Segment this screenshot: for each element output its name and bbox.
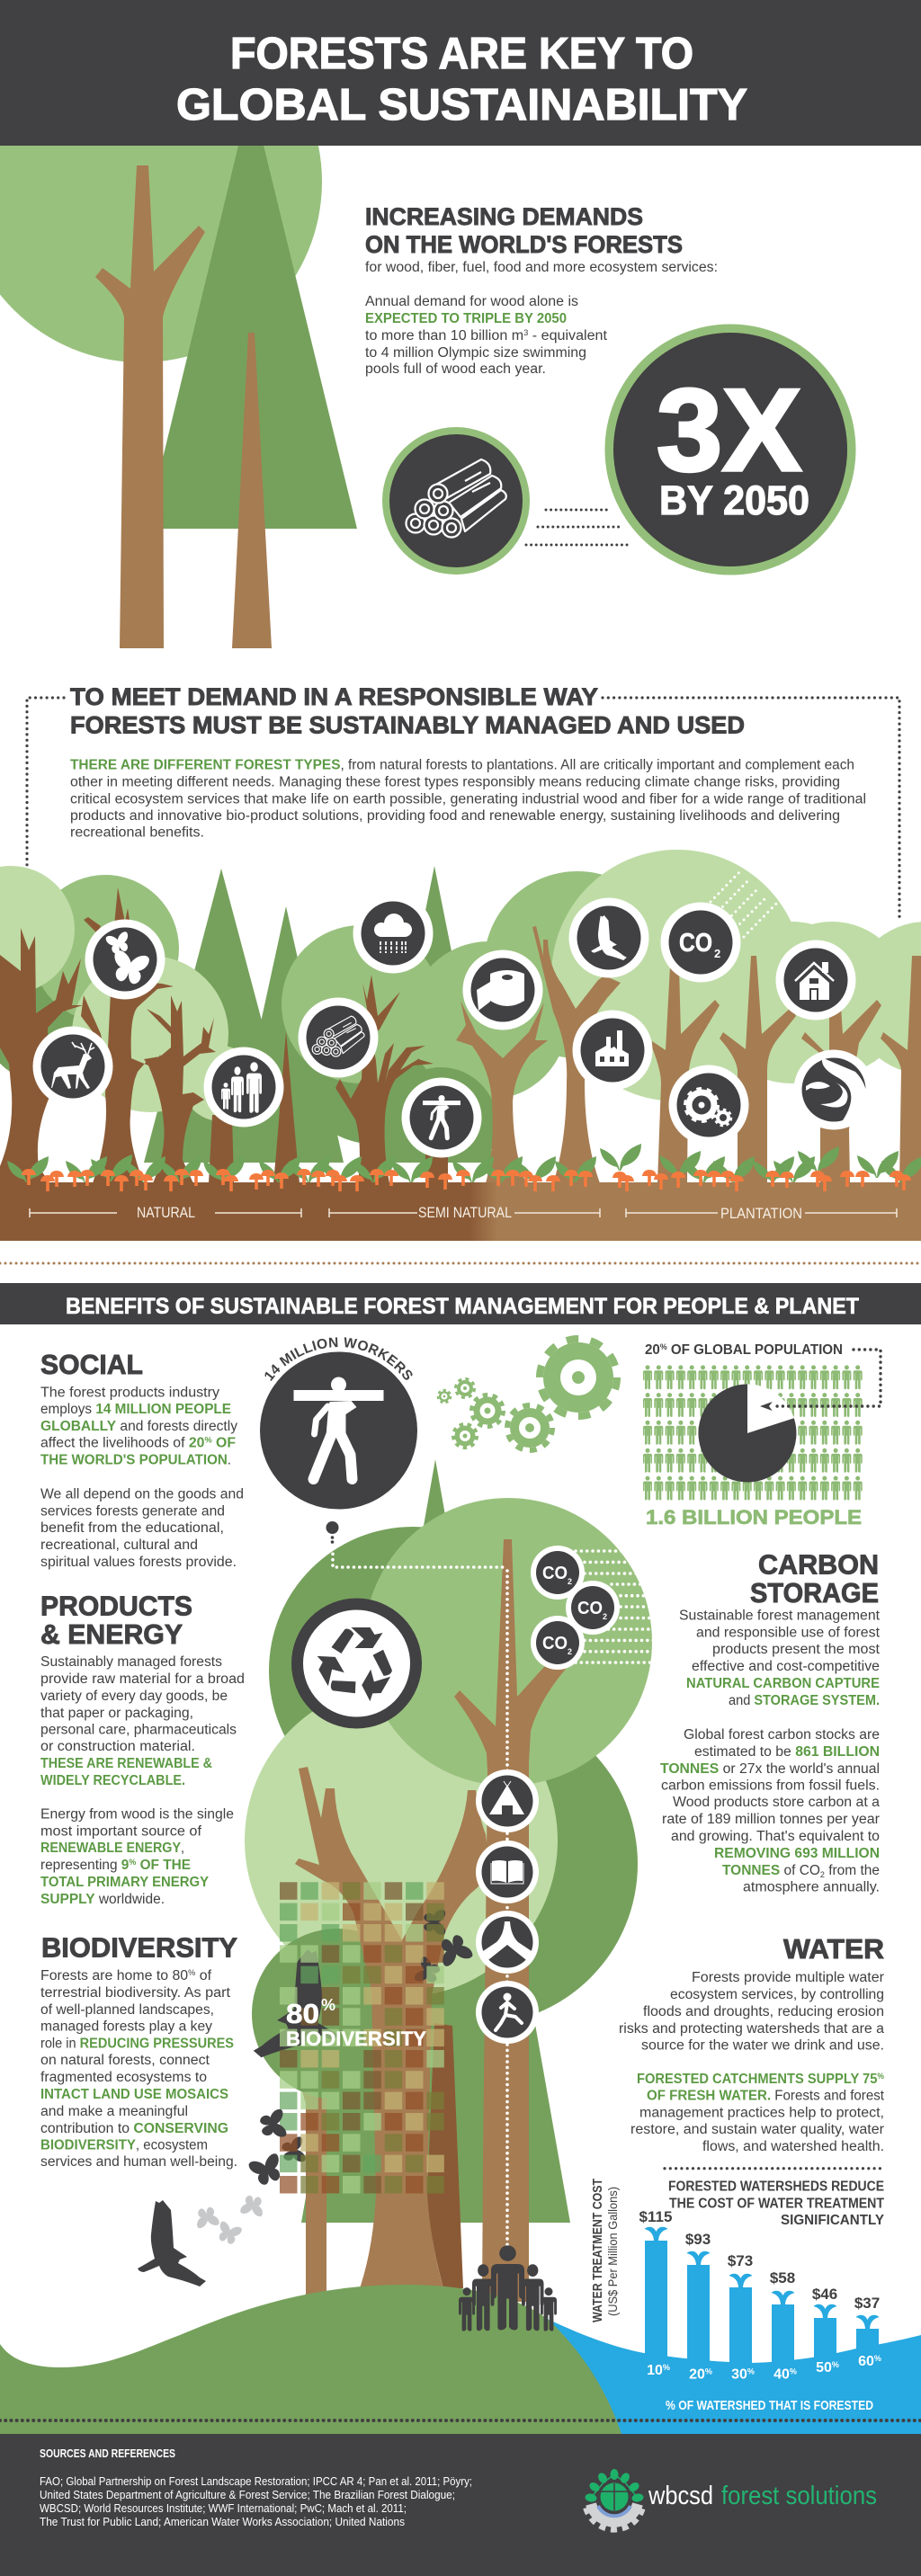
text block: carbon storage bbox=[660, 1549, 881, 1895]
seedlings bbox=[7, 1144, 921, 1183]
panel: intro tree illustration bbox=[0, 1, 357, 648]
text block: social: % bbox=[204, 1436, 212, 1445]
text block: biodiversity: INTACT LAND USE MOSAICS bbox=[40, 2087, 228, 2102]
text block: carbon storage: rate of 189 million tonnes per year bbox=[662, 1812, 880, 1827]
footer: sources bbox=[0, 2434, 921, 2576]
text block: social: THE WORLD'S POPULATION. bbox=[40, 1453, 231, 1467]
text block: biodiversity: role in REDUCING PRESSURES bbox=[40, 2036, 234, 2052]
icon: house bbox=[775, 940, 856, 1020]
mosaic: 80% biodiversity grid bbox=[280, 1882, 444, 2194]
ground with forest type labels bbox=[0, 1182, 921, 1241]
dark marker dot and connector bbox=[326, 1521, 338, 1546]
text block: products and energy: SUPPLY worldwide. bbox=[40, 1892, 165, 1907]
text block: biodiversity: BIODIVERSITY, ecosystem bbox=[40, 2138, 208, 2153]
text block: carbon storage: estimated to be 861 BILLION bbox=[694, 1744, 880, 1760]
panel: plantation tree trunks bbox=[456, 926, 921, 1183]
text block: biodiversity: services and human well-being. bbox=[40, 2154, 237, 2170]
chart category labels: % bbox=[747, 2367, 755, 2376]
panel: natural tree trunks bbox=[0, 887, 448, 1183]
footer: sources: FAO; Global Partnership on Forest Landscape Restoration; IPCC AR 4; Pan et al. 2011; Pöyry; bbox=[40, 2474, 472, 2488]
text block: products and energy: OF THE bbox=[136, 1858, 191, 1873]
dotted divider bbox=[0, 1262, 921, 1264]
text block: products and energy: or construction material. bbox=[40, 1739, 195, 1754]
text block: carbon storage: CARBON bbox=[758, 1549, 879, 1581]
text block: water: flows, and watershed health. bbox=[702, 2139, 884, 2154]
chart category labels: % bbox=[832, 2360, 839, 2369]
CO2 icons: CO bbox=[542, 1634, 568, 1653]
callout: 3X by 2050: 3X bbox=[657, 364, 801, 495]
heading: responsible way: FORESTS MUST BE SUSTAINABLY MANAGED AND USED bbox=[70, 712, 745, 739]
chart title: water treatment cost: FORESTED WATERSHEDS REDUCE bbox=[668, 2179, 884, 2195]
panel: forest scene canopy bbox=[0, 850, 921, 1181]
logo: wbcsd forest solutions: forest solutions bbox=[721, 2482, 877, 2510]
text block: water: FORESTED CATCHMENTS SUPPLY 75 bbox=[637, 2072, 890, 2087]
text block: biodiversity bbox=[40, 1932, 237, 2170]
panel: 20% of global population: 20 bbox=[645, 1342, 660, 1358]
chart category labels: 20 bbox=[689, 2367, 705, 2383]
callout: 3X by 2050 bbox=[604, 324, 856, 575]
text block: water: % bbox=[877, 2072, 884, 2081]
icon: deer bbox=[32, 1027, 113, 1106]
text block: carbon storage: carbon emissions from fossil fuels. bbox=[661, 1778, 880, 1793]
text block: biodiversity: managed forests play a key bbox=[40, 2019, 212, 2035]
text block: carbon storage: NATURAL CARBON CAPTURE bbox=[686, 1676, 880, 1691]
white dotted guide lines bbox=[333, 1548, 657, 2245]
CO2 icons: CO bbox=[542, 1564, 568, 1583]
chart values bbox=[639, 2208, 880, 2312]
panel: workers callout bbox=[260, 1337, 417, 1509]
text block: social: affect the livelihoods of 20 bbox=[40, 1436, 204, 1451]
icon: rain cloud bbox=[353, 894, 434, 973]
text block: water: risks and protecting watersheds that are a bbox=[619, 2021, 884, 2037]
logo: wbcsd forest solutions: wbcsd bbox=[648, 2482, 713, 2510]
footer: sources: WBCSD; World Resources Institute; WWF International; PwC; Mach et al. 2011; bbox=[40, 2501, 407, 2515]
text block: forest types bbox=[70, 757, 866, 841]
icon: runner bbox=[476, 1981, 539, 2044]
chart values: $73 bbox=[728, 2252, 753, 2269]
ground with forest type labels: PLANTATION bbox=[720, 1205, 802, 1222]
chart axis label: (US$ Per Million Gallons) bbox=[605, 2187, 620, 2316]
icon: river and fish bbox=[793, 1050, 874, 1129]
text block: biodiversity: of bbox=[195, 1968, 212, 1983]
butterflies bbox=[194, 1932, 474, 2246]
callout: 80% biodiversity: % bbox=[321, 1996, 335, 2014]
CO2 icons: 2 bbox=[568, 1647, 572, 1656]
text block: biodiversity: contribution to CONSERVING bbox=[40, 2121, 228, 2136]
CO2 icons: 2 bbox=[603, 1612, 607, 1621]
text block: carbon storage: 2 bbox=[820, 1870, 825, 1879]
text block: products and energy: provide raw material for a broad bbox=[40, 1671, 245, 1687]
text block: products and energy: TOTAL PRIMARY ENERGY bbox=[40, 1875, 210, 1890]
text block: products and energy: most important source of bbox=[40, 1823, 202, 1840]
callout: 80% biodiversity bbox=[286, 1996, 426, 2050]
callout: 3X by 2050: BY 2050 bbox=[659, 477, 809, 523]
butterflies behind mosaic bbox=[281, 1910, 445, 2165]
dotted connector bbox=[526, 510, 631, 545]
text block: products and energy: variety of every day goods, be bbox=[40, 1689, 228, 1704]
text block: carbon storage: STORAGE bbox=[750, 1577, 879, 1609]
callout: 80% biodiversity: BIODIVERSITY bbox=[286, 2028, 426, 2050]
icon: forest path bbox=[476, 1911, 539, 1974]
panel: 20% of global population: OF GLOBAL POPULATION bbox=[667, 1342, 843, 1358]
footer: sources: United States Department of Agriculture & Forest Service; The Brazilian Forest Dialogue; bbox=[40, 2488, 455, 2501]
icon: CO2 bbox=[660, 903, 741, 982]
chart category labels: % bbox=[705, 2367, 712, 2376]
dotted frame bbox=[27, 698, 899, 922]
text block: increasing demands: for wood, fiber, fuel, food and more ecosystem services: bbox=[365, 260, 718, 275]
text block: products and energy: personal care, pharmaceuticals bbox=[40, 1723, 237, 1737]
text block: increasing demands: to 4 million Olympic size swimming bbox=[365, 345, 586, 361]
text block: products and energy: PRODUCTS bbox=[40, 1591, 192, 1622]
icon: logs bbox=[299, 998, 378, 1077]
text block: forest types: other in meeting different needs. Managing these forest types responsibly means reducing climate change risks, providing bbox=[70, 775, 840, 790]
text block: biodiversity: fragmented ecosystems to bbox=[40, 2070, 207, 2085]
text block: carbon storage: and growing. That's equivalent to bbox=[671, 1829, 880, 1844]
text block: carbon storage: and responsible use of forest bbox=[696, 1626, 881, 1640]
text block: products and energy: RENEWABLE ENERGY, bbox=[40, 1841, 184, 1856]
text block: products and energy: Sustainably managed forests bbox=[40, 1654, 222, 1670]
text block: carbon storage: Wood products store carbon at a bbox=[673, 1795, 880, 1810]
chart values: $46 bbox=[812, 2286, 837, 2303]
panel: 20% of global population bbox=[643, 1342, 881, 1529]
icon: paper roll bbox=[462, 949, 543, 1030]
text block: water: ecosystem services, by controlling bbox=[670, 1987, 884, 2002]
icon: recycle circle bbox=[297, 1604, 416, 1723]
hawk hidden behind mosaic bbox=[254, 1949, 339, 2057]
icon: gears bbox=[669, 1065, 748, 1145]
text block: social bbox=[40, 1349, 244, 1570]
chart category labels: 50 bbox=[816, 2360, 832, 2375]
chart category labels: 10 bbox=[647, 2363, 663, 2378]
text block: water: management practices help to protect, bbox=[639, 2106, 884, 2120]
text block: products and energy: WIDELY RECYCLABLE. bbox=[40, 1773, 185, 1788]
text block: social: GLOBALLY and forests directly bbox=[40, 1419, 237, 1434]
people group bbox=[459, 2245, 557, 2331]
text block: increasing demands: pools full of wood each year. bbox=[365, 361, 546, 377]
icon: family bbox=[203, 1047, 284, 1128]
text block: carbon storage: Global forest carbon stocks are bbox=[684, 1727, 880, 1743]
text block: increasing demands bbox=[365, 203, 718, 377]
chart values: $115 bbox=[639, 2208, 672, 2225]
text block: water: source for the water we drink and use. bbox=[641, 2037, 884, 2054]
ground with forest type labels: SEMI NATURAL bbox=[418, 1204, 512, 1221]
heading: responsible way: TO MEET DEMAND IN A RESPONSIBLE WAY bbox=[70, 683, 598, 710]
CO2 icons: 2 bbox=[568, 1577, 572, 1586]
text block: water bbox=[619, 1933, 885, 2154]
panel: benefits tree illustration bbox=[245, 1459, 652, 2302]
chart category labels: % bbox=[874, 2354, 881, 2363]
icon: butterflies bbox=[85, 919, 165, 1000]
icon: CO2: CO bbox=[679, 929, 712, 958]
chart values: $93 bbox=[685, 2231, 711, 2248]
text block: increasing demands: ON THE WORLD'S FORESTS bbox=[365, 231, 683, 258]
text block: products and energy: representing 9 bbox=[40, 1858, 129, 1873]
text block: social: OF bbox=[212, 1436, 236, 1451]
dotted divider bbox=[0, 2419, 921, 2422]
chart category labels: 40 bbox=[773, 2367, 790, 2383]
text block: products and energy: % bbox=[129, 1858, 136, 1867]
mushrooms bbox=[22, 1169, 911, 1191]
callout: 80% biodiversity: 80 bbox=[286, 1998, 319, 2029]
text block: carbon storage: effective and cost-competitive bbox=[692, 1659, 880, 1674]
text block: social: employs 14 MILLION PEOPLE bbox=[40, 1402, 231, 1417]
chart values: $58 bbox=[770, 2269, 795, 2286]
text block: social: services forests generate and bbox=[40, 1503, 225, 1520]
text block: increasing demands: to more than 10 billion m bbox=[365, 328, 518, 343]
text block: social: We all depend on the goods and bbox=[40, 1487, 244, 1502]
text block: carbon storage: products present the most bbox=[712, 1642, 881, 1657]
footer: sources: SOURCES AND REFERENCES bbox=[40, 2447, 175, 2460]
ground with forest type labels: NATURAL bbox=[137, 1204, 195, 1221]
text block: social: The forest products industry bbox=[40, 1385, 219, 1400]
chart title: water treatment cost bbox=[668, 2179, 885, 2228]
text block: increasing demands: 3 bbox=[523, 328, 528, 337]
text block: carbon storage: TONNES or 27x the world's annual bbox=[660, 1761, 880, 1777]
title banner bbox=[0, 0, 921, 146]
text block: social: SOCIAL bbox=[40, 1349, 143, 1380]
benefits banner: BENEFITS OF SUSTAINABLE FOREST MANAGEMENT FOR PEOPLE & PLANET bbox=[66, 1294, 859, 1319]
text block: increasing demands: Annual demand for wood alone is bbox=[365, 294, 578, 309]
text block: water: Forests provide multiple water bbox=[692, 1970, 884, 1985]
title banner: GLOBAL SUSTAINABILITY bbox=[176, 81, 747, 129]
text block: forest types: recreational benefits. bbox=[70, 825, 204, 841]
text block: increasing demands: INCREASING DEMANDS bbox=[365, 203, 643, 230]
CO2 icons: CO bbox=[577, 1599, 603, 1618]
icon: factory bbox=[572, 1011, 653, 1090]
text block: carbon storage: and STORAGE SYSTEM. bbox=[729, 1693, 880, 1708]
text block: biodiversity: of well-planned landscapes, bbox=[40, 2002, 214, 2018]
text block: forest types: THERE ARE DIFFERENT FOREST TYPES, from natural forests to plantations. All are critically important and complement each bbox=[70, 757, 854, 773]
chart category labels bbox=[647, 2354, 881, 2383]
text block: biodiversity: % bbox=[188, 1968, 195, 1977]
text block: biodiversity: on natural forests, connect bbox=[40, 2053, 210, 2068]
text block: products and energy: that paper or packaging, bbox=[40, 1706, 193, 1721]
green hill bbox=[0, 2285, 621, 2434]
chart values: $37 bbox=[854, 2295, 880, 2312]
text block: increasing demands: EXPECTED TO TRIPLE BY 2050 bbox=[365, 311, 567, 326]
text block: products and energy: Energy from wood is the single bbox=[40, 1807, 234, 1823]
text block: social: spiritual values forests provide. bbox=[40, 1555, 237, 1570]
icon: tent bbox=[476, 1769, 539, 1832]
chart axis label: WATER TREATMENT COST bbox=[591, 2179, 605, 2322]
heading: responsible way bbox=[70, 683, 745, 739]
text block: products and energy: & ENERGY bbox=[40, 1618, 183, 1650]
panel: workers callout: 14 MILLION WORKERS bbox=[264, 1337, 413, 1381]
text block: water: OF FRESH WATER. Forests and forest bbox=[647, 2089, 885, 2104]
bird silhouette bbox=[138, 2200, 206, 2286]
panel: 20% of global population: 1.6 BILLION PEOPLE bbox=[646, 1506, 862, 1529]
text block: carbon storage: atmosphere annually. bbox=[743, 1879, 880, 1895]
gears bbox=[438, 1339, 617, 1450]
text block: forest types: critical ecosystem services that make life on earth possible, generating industrial wood and fiber for a wide range of traditional bbox=[70, 791, 866, 807]
chart category labels: 30 bbox=[731, 2367, 747, 2383]
text block: biodiversity: BIODIVERSITY bbox=[41, 1932, 237, 1964]
text block: products and energy: THESE ARE RENEWABLE & bbox=[40, 1756, 212, 1771]
icon: book bbox=[476, 1841, 539, 1903]
text block: carbon storage: REMOVING 693 MILLION bbox=[714, 1846, 880, 1861]
text block: social: benefit from the educational, bbox=[40, 1520, 224, 1536]
chart x axis label: % OF WATERSHED THAT IS FORESTED bbox=[666, 2398, 873, 2413]
text block: products and energy bbox=[40, 1591, 245, 1907]
text block: water: WATER bbox=[783, 1933, 884, 1965]
chart axis label bbox=[591, 2179, 620, 2322]
logo: wbcsd forest solutions bbox=[585, 2469, 877, 2526]
icon: worker bbox=[401, 1077, 482, 1158]
text block: increasing demands: - equivalent bbox=[528, 328, 608, 343]
footer: sources: The Trust for Public Land; American Water Works Association; United Nations bbox=[40, 2515, 405, 2528]
text block: forest types: products and innovative bio-product solutions, providing food and renewable energy, sustaining livelihoods and delivering bbox=[70, 808, 840, 824]
icon: wood logs circle bbox=[382, 427, 530, 575]
chart category labels: % bbox=[790, 2367, 797, 2376]
title banner: FORESTS ARE KEY TO bbox=[230, 30, 693, 78]
chart title: water treatment cost: SIGNIFICANTLY bbox=[781, 2213, 885, 2228]
text block: biodiversity: terrestrial biodiversity. As part bbox=[40, 1985, 231, 2001]
chart category labels: % bbox=[663, 2363, 670, 2372]
icon: CO2: 2 bbox=[714, 947, 720, 960]
text block: social: recreational, cultural and bbox=[40, 1538, 198, 1553]
panel: 20% of global population: % bbox=[660, 1342, 667, 1351]
icon: bird bbox=[568, 897, 649, 978]
chart title: water treatment cost: THE COST OF WATER TREATMENT bbox=[669, 2197, 884, 2212]
chart category labels: 60 bbox=[858, 2354, 874, 2369]
benefits banner bbox=[0, 1283, 921, 1324]
water and bar chart bbox=[531, 2227, 921, 2434]
text block: carbon storage: TONNES of CO bbox=[722, 1863, 820, 1878]
text block: carbon storage: Sustainable forest management bbox=[679, 1609, 881, 1624]
text block: biodiversity: and make a meaningful bbox=[40, 2104, 188, 2119]
text block: water: restore, and sustain water quality, water bbox=[630, 2122, 884, 2137]
text block: water: floods and droughts, reducing erosion bbox=[643, 2004, 884, 2019]
CO2 icons bbox=[531, 1546, 620, 1670]
text block: carbon storage: from the bbox=[825, 1863, 880, 1878]
text block: biodiversity: Forests are home to 80 bbox=[40, 1968, 184, 1983]
